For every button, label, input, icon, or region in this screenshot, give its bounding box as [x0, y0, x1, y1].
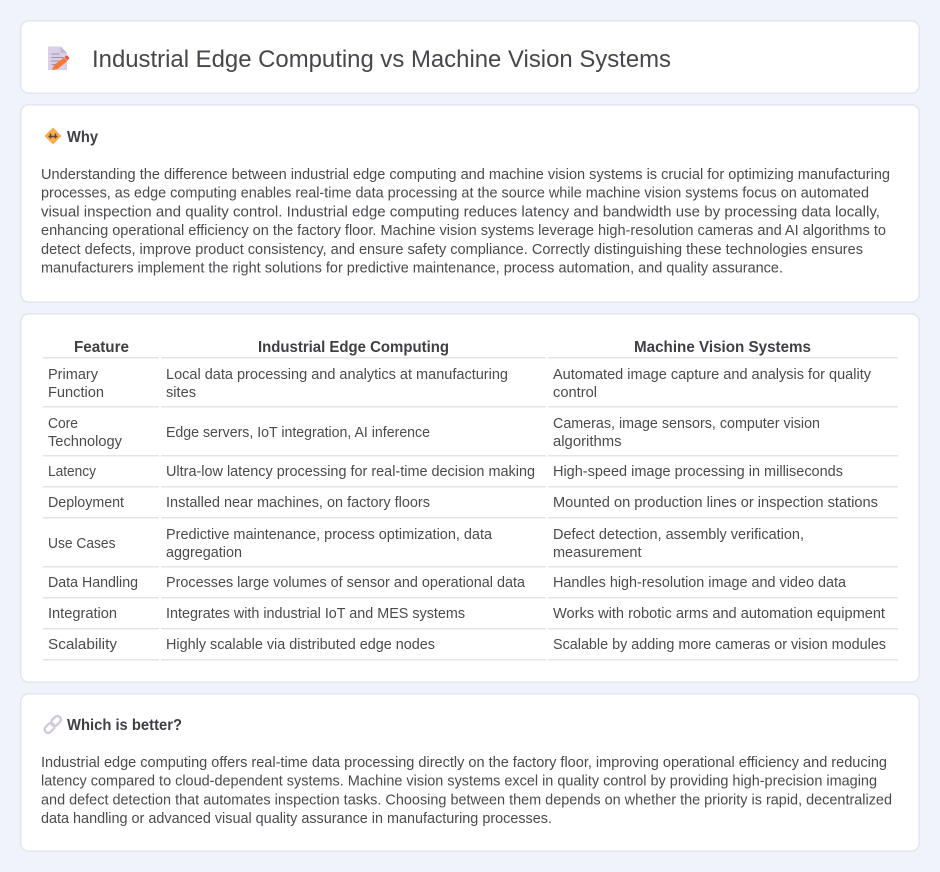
row: data handling: [48, 575, 846, 591]
table header row: [74, 339, 811, 356]
row: scalability: Highly scalable via distributed edge nodes: [166, 637, 435, 653]
row: use cases: Use Cases: [48, 536, 116, 552]
icon: document with pencil: [48, 46, 70, 70]
row: scalability: [48, 637, 886, 653]
text block: why paragraph: processes, as edge computing enables real-time data processing at the source while machine vision systems focus on automated: [41, 186, 869, 202]
row: scalability: Scalability: [48, 637, 118, 653]
panel: comparison table: [21, 314, 919, 682]
row: use cases: measurement: [553, 545, 642, 561]
row: use cases: aggregation: [166, 545, 242, 561]
text block: which paragraph: latency compared to cloud-dependent systems. Machine vision systems excel in quality control by providing high-precision imaging: [41, 774, 877, 790]
row: latency: Ultra-low latency processing for real-time decision making: [166, 464, 535, 480]
row: primary function: Automated image capture and analysis for quality: [553, 367, 872, 383]
row: scalability: Scalable by adding more cameras or vision modules: [553, 637, 886, 653]
text block: which paragraph: [41, 755, 892, 827]
row: use cases: Defect detection, assembly verification,: [553, 527, 804, 543]
panel: why: [21, 105, 919, 302]
table header row: Industrial Edge Computing: [258, 339, 449, 356]
row: deployment: Mounted on production lines or inspection stations: [553, 495, 878, 511]
icon: link: [43, 715, 62, 734]
row: use cases: Predictive maintenance, process optimization, data: [166, 527, 492, 543]
row: deployment: Deployment: [48, 495, 124, 511]
row: data handling: Data Handling: [48, 575, 138, 591]
row: primary function: Primary: [48, 367, 99, 383]
row: core technology: algorithms: [553, 434, 622, 450]
row: deployment: [48, 495, 878, 511]
icon: orange diamond: [44, 128, 62, 144]
row: primary function: Function: [48, 385, 104, 401]
text block: which paragraph: Industrial edge computing offers real-time data processing directly on the factory floor, improving operational efficiency and reducing: [41, 755, 887, 771]
heading: which is better: Which is better?: [67, 717, 182, 734]
row: core technology: Cameras, image sensors, computer vision: [553, 416, 820, 432]
row: integration: Works with robotic arms and automation equipment: [553, 606, 885, 622]
row: latency: Latency: [48, 464, 97, 480]
row: use cases: [48, 527, 804, 561]
title: Industrial Edge Computing vs Machine Vision Systems: [92, 46, 671, 73]
row: data handling: Processes large volumes of sensor and operational data: [166, 575, 525, 591]
text block: why paragraph: enhancing operational efficiency on the factory floor. Machine vision systems leverage high-resolution cameras and AI algorithms to: [41, 223, 886, 239]
heading: why: Why: [67, 129, 98, 146]
text block: why paragraph: manufacturers implement the right solutions for predictive maintenance, process automation, and quality assurance.: [41, 260, 783, 276]
panel: which is better: [21, 694, 919, 851]
text block: why paragraph: detect defects, improve product consistency, and ensure safety compliance. Correctly distinguishing these technologies ensures: [41, 242, 863, 258]
row: primary function: [48, 367, 872, 401]
text block: which paragraph: data handling or advanced visual quality assurance in manufacturing processes.: [41, 811, 552, 827]
text block: why paragraph: visual inspection and quality control. Industrial edge computing reduces latency and bandwidth use by processing data locally,: [41, 204, 880, 220]
row: latency: [48, 464, 843, 480]
row: core technology: [48, 416, 820, 450]
row: primary function: sites: [166, 385, 196, 401]
row: deployment: Installed near machines, on factory floors: [166, 495, 430, 511]
row: primary function: Local data processing and analytics at manufacturing: [166, 367, 508, 383]
row: integration: Integrates with industrial IoT and MES systems: [166, 606, 465, 622]
panel: title header: [21, 21, 919, 93]
text block: why paragraph: Understanding the difference between industrial edge computing and machine vision systems is crucial for optimizing manufacturing: [41, 167, 890, 183]
table header row: Machine Vision Systems: [634, 339, 811, 356]
row: data handling: Handles high-resolution image and video data: [553, 575, 846, 591]
row: core technology: Edge servers, IoT integration, AI inference: [166, 425, 430, 441]
row: integration: [48, 606, 885, 622]
row: latency: High-speed image processing in milliseconds: [553, 464, 843, 480]
table header row: Feature: [74, 339, 129, 356]
row: primary function: control: [553, 385, 597, 401]
text block: which paragraph: and defect detection that automates inspection tasks. Choosing between them depends on whether the priority is rapid, decentralized: [41, 792, 892, 808]
row: core technology: Technology: [48, 434, 123, 450]
row: core technology: Core: [48, 416, 78, 432]
row: integration: Integration: [48, 606, 117, 622]
text block: why paragraph: [41, 167, 890, 276]
